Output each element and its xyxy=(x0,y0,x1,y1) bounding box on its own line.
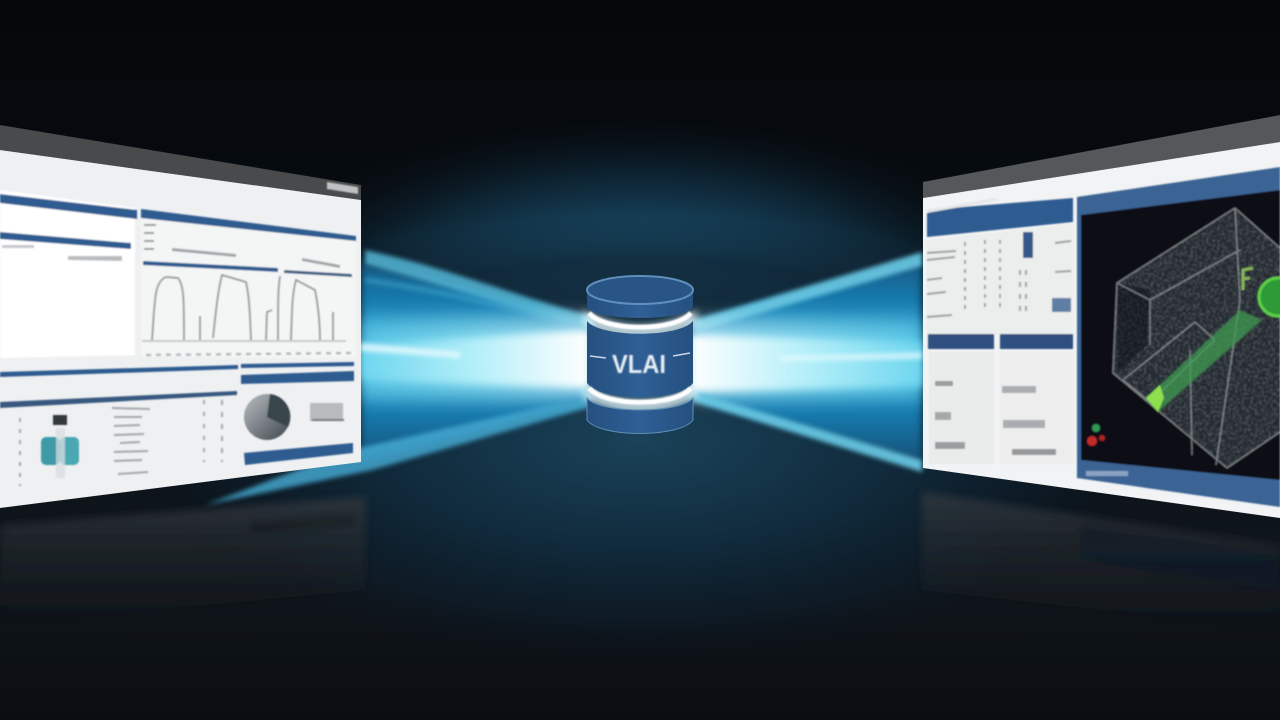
axis gizmo xyxy=(1087,424,1105,446)
dashboard: left xyxy=(0,125,361,508)
viewer status bar label xyxy=(1086,471,1128,476)
light rays: left xyxy=(205,250,592,505)
window body xyxy=(923,142,1280,518)
glowing rings xyxy=(589,313,691,402)
title bar label xyxy=(327,182,358,194)
panel: line charts xyxy=(141,209,356,358)
database cylinder with VLAI label xyxy=(583,276,697,434)
panel: left data table xyxy=(927,198,1073,335)
window title bar xyxy=(923,115,1280,198)
cylinder top section xyxy=(587,290,693,318)
chart axis ticks xyxy=(146,353,352,355)
window body xyxy=(0,150,361,508)
panel: lower left cards xyxy=(928,334,1073,464)
panel: lower table xyxy=(0,365,238,486)
panel: left white pane xyxy=(0,190,137,358)
panel: 3D viewer xyxy=(1077,167,1280,507)
window title bar xyxy=(0,125,361,200)
cylinder bottom section xyxy=(587,398,693,434)
light rays: right xyxy=(690,252,922,472)
dashboard: right xyxy=(923,115,1280,518)
green beam xyxy=(1146,310,1262,412)
floor reflections of the dashboards xyxy=(0,492,1280,630)
green ring xyxy=(1259,278,1280,316)
cylinder label text: VLAI xyxy=(612,349,666,379)
cylinder middle section xyxy=(587,321,693,397)
chart lines xyxy=(152,275,333,340)
3D wireframe cube xyxy=(1113,208,1280,468)
green marker xyxy=(1243,268,1253,290)
panel: pie chart xyxy=(241,362,354,465)
icon: teal diagram xyxy=(41,415,79,478)
